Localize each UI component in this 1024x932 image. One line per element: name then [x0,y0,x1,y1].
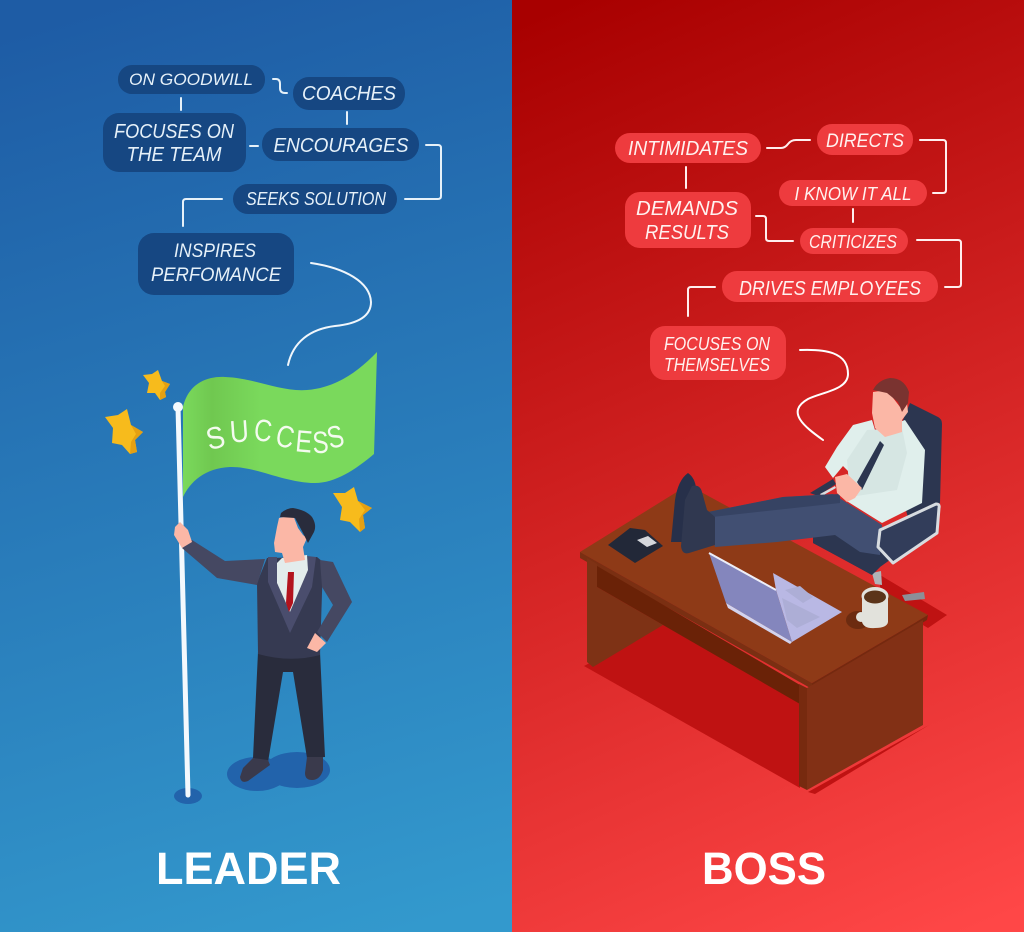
mug [846,587,888,629]
phone [608,528,663,563]
flag text: S [203,420,229,457]
pill: criticizes: CRITICIZES [809,232,897,252]
pill: i know it all: I KNOW IT ALL [794,184,912,204]
arm on hip [317,560,352,642]
title: leader: LEADER [156,843,341,894]
connectors: leader [181,79,441,226]
title: boss: BOSS [702,843,826,894]
shirt [825,420,925,523]
flag text: U [229,414,250,450]
pill: demands results: RESULTS [645,222,730,244]
illustration: boss at desk [580,378,947,794]
laptop [709,553,842,644]
desk modesty panel [597,566,800,704]
hand [835,474,862,502]
jacket [257,557,323,659]
pill: inspires performance: PERFOMANCE [151,264,282,286]
desk left panel [587,558,663,667]
hand on hip [307,633,326,652]
pill: inspires performance: INSPIRES [174,240,256,262]
flag text: S [323,418,347,455]
connectors: boss [686,140,961,316]
arrow: curved line to boss [798,350,848,440]
trousers [253,652,325,762]
shirt shade [847,428,907,497]
pill: encourages [262,128,419,161]
pill: i know it all [779,180,927,206]
pill: drives employees [722,271,938,302]
pill: seeks solution [233,184,397,214]
pill: coaches: COACHES [302,82,396,105]
shoe back [671,473,696,542]
pill: focuses on the team: THE TEAM [126,144,222,166]
pill: drives employees: DRIVES EMPLOYEES [739,278,922,300]
pill: inspires performance [138,233,294,295]
armrest [878,504,939,563]
shoes [240,757,323,782]
pill: focuses on themselves: FOCUSES ON [664,334,771,354]
pill: on goodwill: ON GOODWILL [129,70,253,89]
illustration: leader with flag [105,352,377,804]
desk right panel [807,620,923,790]
pill: intimidates: INTIMIDATES [628,137,748,160]
flag pole [173,402,188,795]
desk top [580,485,928,683]
pill: demands results [625,192,751,248]
desk edges [580,552,812,689]
pill: coaches [293,77,405,110]
shirt [277,555,308,612]
hand raised [174,522,192,548]
icon: star top [143,370,170,400]
pill: encourages: ENCOURAGES [274,134,409,157]
flag text: E [294,424,314,459]
hair [280,508,315,543]
trousers shade [708,494,840,517]
icon: star right [333,487,372,532]
tie [286,572,294,612]
panel: boss background [512,0,1024,932]
flag [183,352,377,497]
pill: seeks solution: SEEKS SOLUTION [246,189,387,209]
flag pole shadow [174,788,202,804]
flag text: S [311,425,329,460]
pill: on goodwill [118,65,265,94]
pill: focuses on themselves: THEMSELVES [664,355,770,375]
pill: focuses on themselves [650,326,786,380]
shoe front [681,486,715,553]
pill: demands results: DEMANDS [636,198,739,220]
leader trait map [103,65,441,295]
pill: intimidates [615,133,761,163]
panel: leader background [0,0,512,932]
trousers [708,494,882,555]
figure: leader [174,508,352,791]
flag text: C [273,418,298,455]
icon: star left [105,409,143,454]
pill: focuses on the team: FOCUSES ON [114,121,234,143]
hair [873,378,909,412]
floor shadows [584,575,947,794]
pill: directs [817,124,913,155]
lapels [268,556,316,633]
neck and face [274,515,307,563]
chair seat above desk edge [813,530,880,575]
chair [810,403,942,601]
pill: directs: DIRECTS [826,130,904,152]
arrow: curved line to flag [288,263,371,365]
tie [857,441,884,490]
flag text [203,413,347,460]
feet shadow [227,752,330,791]
flag text: C [252,413,274,449]
face [872,390,908,437]
arm raised [182,540,265,585]
boss trait map [615,124,961,380]
pill: focuses on the team [103,113,246,172]
